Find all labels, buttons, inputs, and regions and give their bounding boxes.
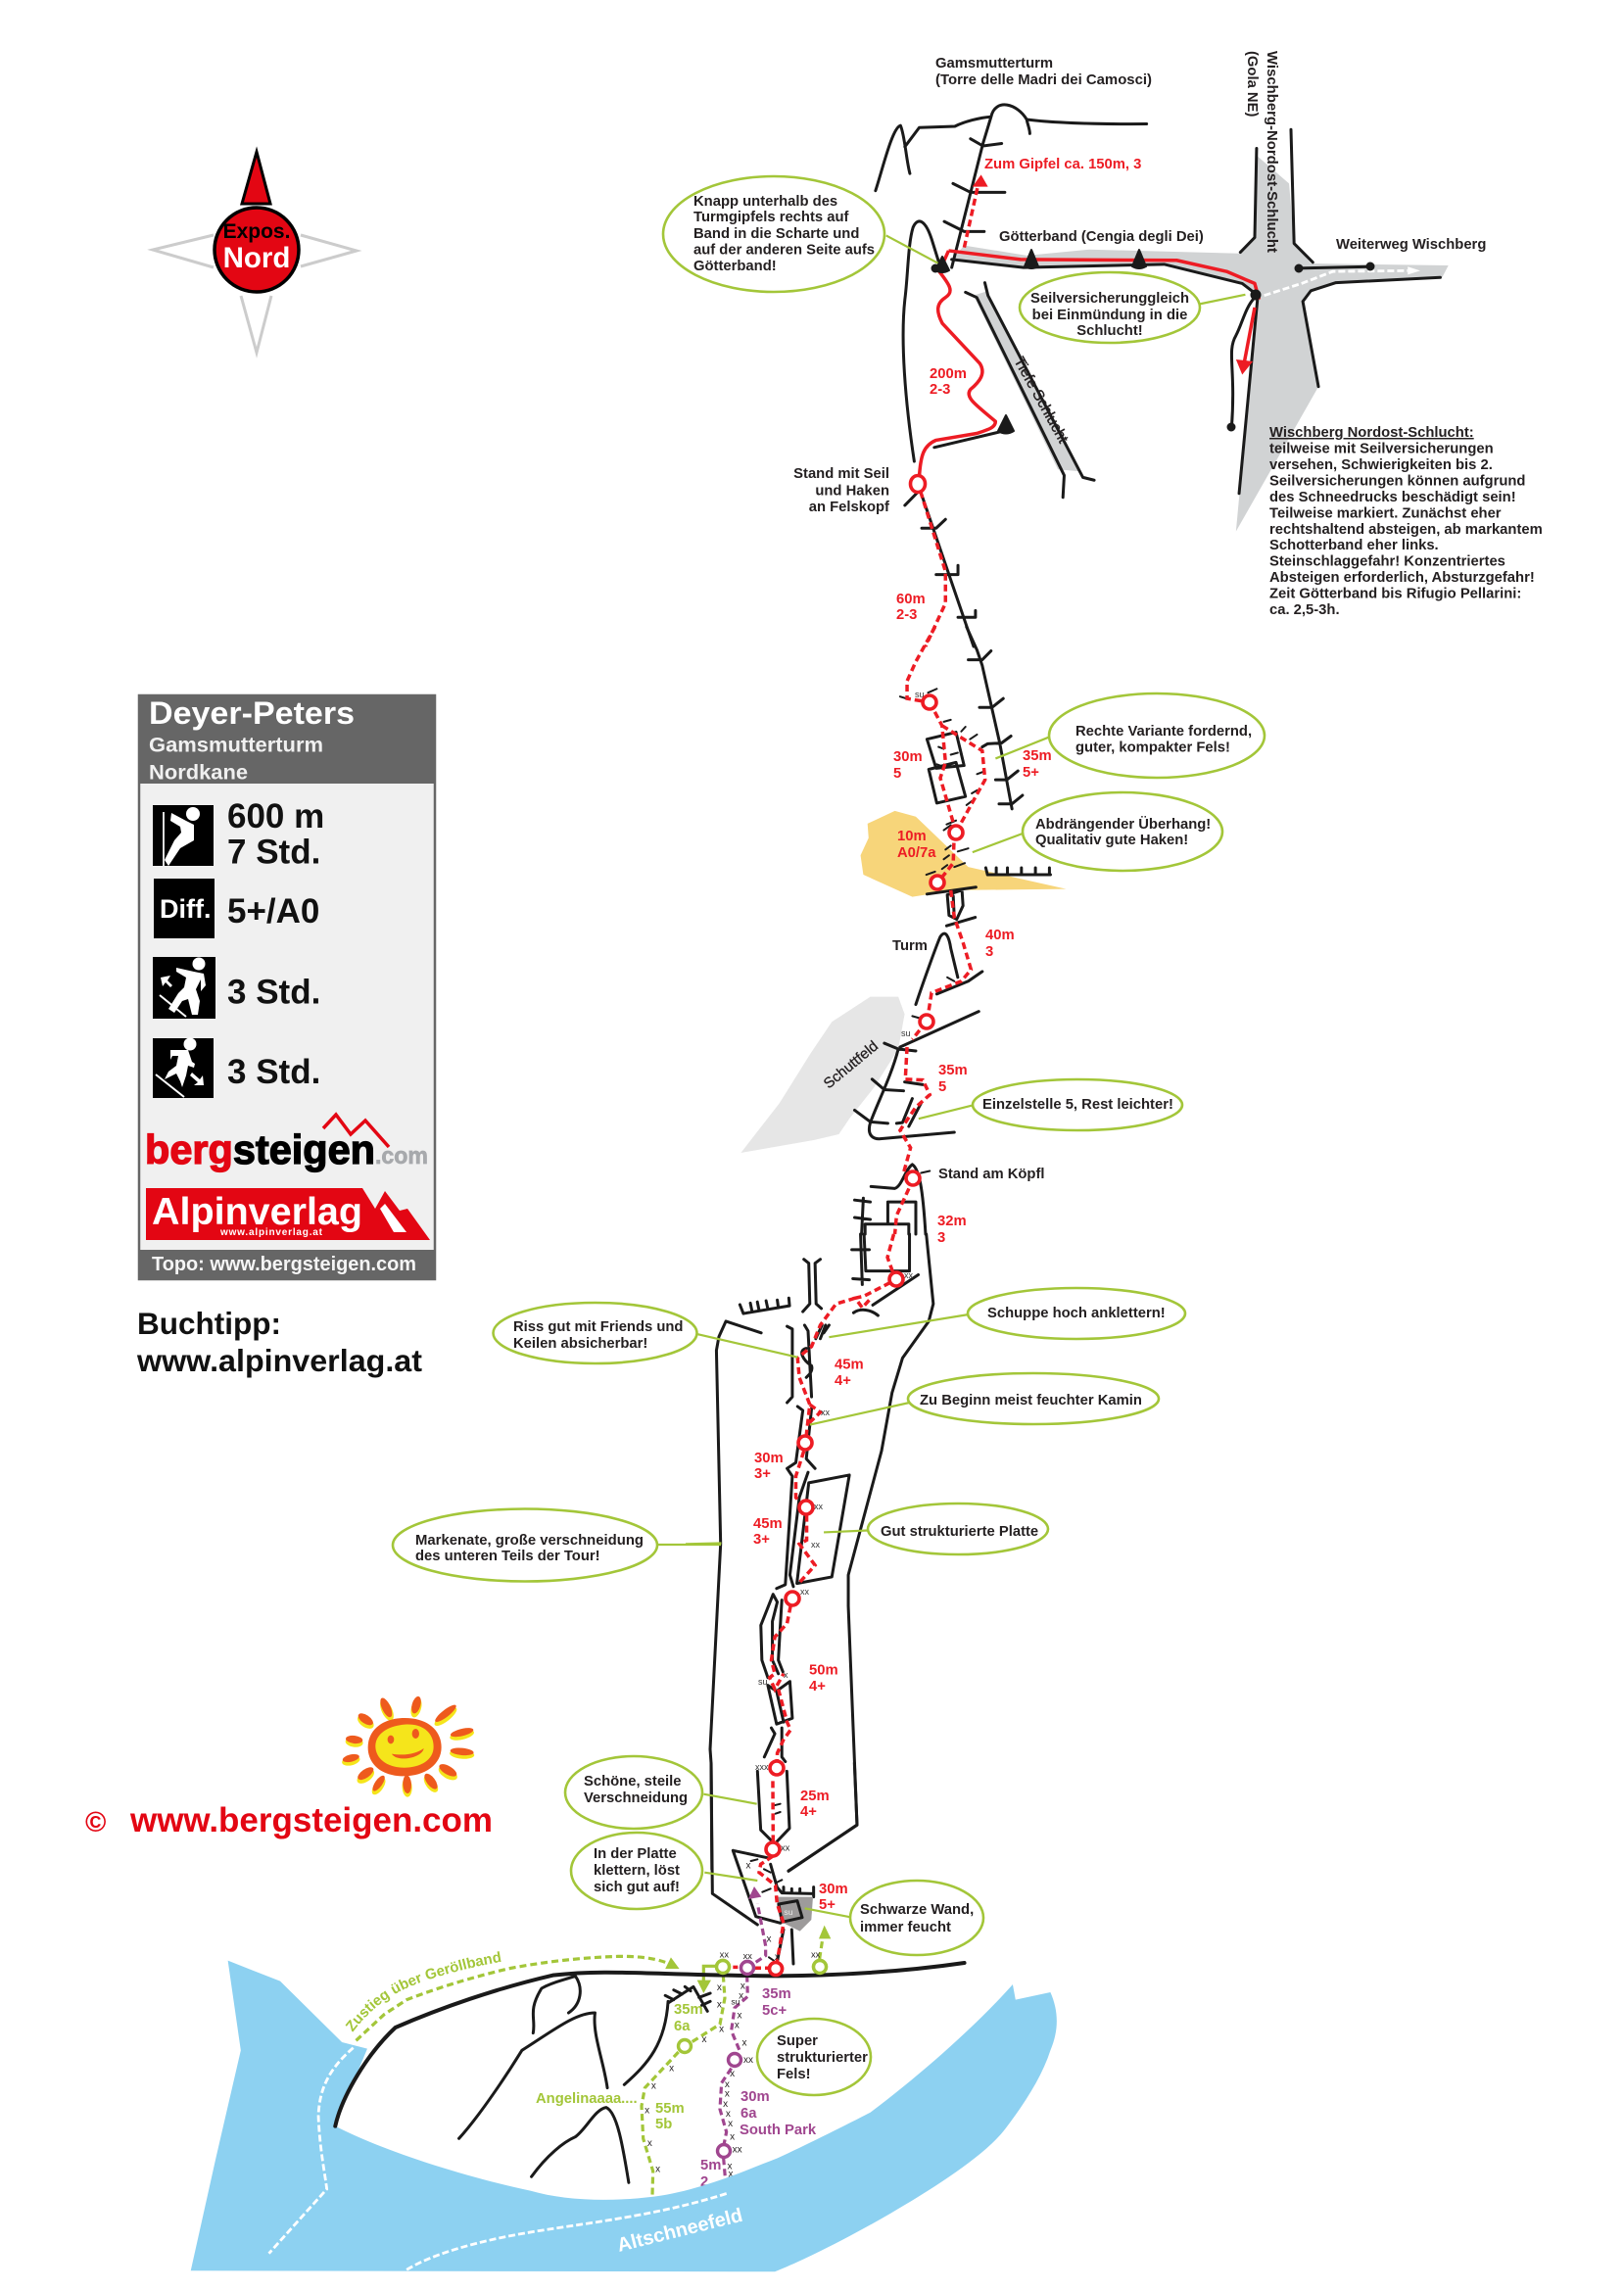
pitch labels: mid section: 3 (985, 944, 993, 960)
green arrows (819, 1926, 831, 1938)
callout: Knapp unterhalb: auf der anderen Seite aufs (693, 243, 875, 259)
panel header: Deyer-Peters (149, 695, 355, 731)
pitch labels: Angelina route: 6a (674, 2019, 691, 2034)
callout: Abdrängender Überhang: Qualitativ gute Haken! (1035, 833, 1188, 848)
logo: Alpinverlag: Alpinverlag (152, 1191, 362, 1233)
pitch labels: mid section: 35m (938, 1063, 968, 1078)
pitch labels: lower wall: 3+ (753, 1532, 770, 1548)
x marks: bolts (645, 1842, 821, 2180)
bolt ticks (900, 689, 982, 1173)
pitch labels: South Park route: 5m (700, 2158, 721, 2173)
icon: ascent hiker (153, 957, 215, 1019)
callout: Markenate Verschneidung (393, 1508, 721, 1581)
pitch labels: lower wall: 4+ (835, 1373, 851, 1389)
pitch labels: mid section: 5+ (1023, 765, 1039, 781)
x marks: bolts: x (669, 2063, 674, 2074)
x marks: bolts: x (775, 1952, 780, 1963)
green callout leaders (919, 738, 1049, 1119)
text block: Wischberg Nordost-Schlucht: des Schneedrucks beschädigt sein! (1269, 490, 1516, 505)
icon: smiling sun (341, 1695, 475, 1797)
panel header (138, 694, 436, 784)
x marks: bolts: su (731, 1997, 740, 2007)
label: Gamsmutterturm: Gamsmutterturm (935, 56, 1053, 72)
label: Tiefe Schlucht: Tiefe Schlucht (1011, 355, 1072, 447)
x marks: bolts: x (726, 2109, 731, 2120)
pitch labels: lower wall: 4+ (809, 1679, 826, 1694)
text block: Wischberg Nordost-Schlucht: Wischberg Nordost-Schlucht: (1269, 425, 1474, 441)
bolt ticks (751, 1804, 782, 1961)
text block: Wischberg Nordost-Schlucht: Seilversicherungen können aufgrund (1269, 474, 1525, 490)
callout: Seilversicherung: bei Einmündung in die (1032, 308, 1187, 323)
callout: Knapp unterhalb (663, 176, 884, 292)
label: Angelinaaaa route name: Angelinaaaa.... (536, 2091, 638, 2107)
wall outline and cracks (710, 1234, 933, 1871)
book tip: www.alpinverlag.at (136, 1343, 423, 1378)
book tip: Buchtipp: (137, 1306, 281, 1341)
text block: Wischberg Nordost-Schlucht: Absteigen erforderlich, Absturzgefahr! (1269, 570, 1535, 586)
panel header: Gamsmutterturm (149, 735, 323, 756)
x marks: bolts: x (740, 1981, 745, 1991)
x marks: bolts: xx (743, 2055, 753, 2066)
callout: Abdrängender Überhang: Abdrängender Überhang! (1035, 816, 1211, 833)
compass: exposure north: Nord (223, 242, 290, 274)
pitch labels: mid section: 5 (938, 1079, 946, 1095)
label: Schuttfeld: Schuttfeld (821, 1038, 882, 1092)
callout: Markenate Verschneidung: des unteren Teils der Tour! (415, 1549, 600, 1564)
text block: Wischberg Nordost-Schlucht: Zeit Götterband bis Rifugio Pellarini: (1269, 586, 1521, 601)
pitch label: 200m: 2-3 (930, 382, 950, 398)
summit route: red solid and dashed (886, 174, 1420, 646)
white descent paths (269, 2048, 727, 2269)
pitch labels: mid section: 3 (937, 1230, 945, 1246)
x marks: bolts: xx (720, 1949, 729, 1959)
pitch labels: mid section: 10m (897, 829, 927, 844)
label: gully vertical names (1244, 51, 1279, 253)
callout: Markenate Verschneidung: Markenate, große verschneidung (415, 1533, 644, 1549)
pitch labels: lower wall: 30m (754, 1451, 784, 1466)
rock outline strokes (876, 105, 1440, 646)
callout: Schöne Verschneidung (565, 1756, 702, 1829)
text block: Wischberg Nordost-Schlucht: rechtshaltend absteigen, ab markantem (1269, 522, 1543, 538)
icon: descent hiker (153, 1038, 214, 1098)
logo: Alpinverlag (146, 1188, 430, 1240)
x marks: bolts: x (735, 2020, 740, 2030)
purple route dashes (720, 1903, 766, 2181)
x marks: bolts: x (739, 1991, 743, 2002)
label: Gamsmutterturm (935, 56, 1152, 88)
callout: Schuppe: Schuppe hoch anklettern! (987, 1306, 1166, 1321)
deep gully shading (974, 292, 1079, 471)
x marks: bolts: x (737, 2010, 741, 2021)
label: stand with rope (793, 466, 889, 515)
scree gully shading (952, 156, 1449, 531)
copyright line: www.bergsteigen.com (129, 1801, 493, 1839)
re-drawn base rings over ledge (717, 1961, 827, 1975)
callout: Zu Beginn: Zu Beginn meist feuchter Kamin (920, 1393, 1142, 1408)
x marks: bolts: x (701, 2034, 706, 2045)
callout: Schwarze Wand (850, 1881, 983, 1955)
pitch labels: mid section: 32m (937, 1214, 967, 1229)
small protection marks on mid wall: su (901, 1028, 911, 1038)
logo: Alpinverlag: www.alpinverlag.at (219, 1227, 323, 1238)
text block: Wischberg Nordost-Schlucht: Steinschlaggefahr! Konzentriertes (1269, 554, 1505, 570)
red route dashes (770, 1234, 895, 1768)
callout: Super strukturierter Fels: Super (777, 2033, 818, 2049)
callout: In der Platte: klettern, löst (594, 1863, 680, 1879)
red route dashes (895, 627, 985, 1234)
label: approach: Zustieg über Geröllband (345, 1951, 502, 2031)
pitch label: 200m (930, 366, 967, 398)
text block: Wischberg Nordost-Schlucht: Teilweise markiert. Zunächst eher (1269, 505, 1502, 521)
approach path (357, 1956, 665, 2040)
pitch labels: Angelina route: 55m (655, 2101, 685, 2117)
callout: Gut strukturierte Platte (868, 1503, 1048, 1554)
pitch labels: lower wall: 45m (835, 1358, 864, 1373)
pitch label: 60m: 2-3 (896, 607, 917, 623)
rock outline strokes (854, 627, 1050, 1234)
green callout leaders (703, 1794, 850, 1917)
pitch labels: mid section: A0/7a (897, 845, 936, 861)
label: stand with rope: an Felskopf (809, 500, 889, 515)
text block: Wischberg Nordost-Schlucht (1269, 425, 1543, 618)
text block: Wischberg Nordost-Schlucht: teilweise mit Seilversicherungen (1269, 441, 1494, 456)
compass: exposure north: Expos. (223, 220, 290, 243)
route stations: green and purple rings (678, 1961, 827, 2157)
label: Turm: Turm (892, 938, 928, 954)
pitch labels: South Park route: 2 (700, 2174, 708, 2190)
pitch labels: mid section (893, 748, 1052, 1246)
pitch labels: lower wall: 25m (800, 1789, 830, 1804)
pitch labels: mid section: 5 (893, 766, 901, 782)
pitch labels: South Park route: 30m (740, 2089, 770, 2105)
pitch labels: Angelina route: 35m (674, 2002, 703, 2018)
book tip (136, 1306, 423, 1378)
icon: climber (153, 805, 214, 866)
pitch labels: lower wall: 45m (753, 1516, 783, 1532)
small protection marks on mid wall: xxx (755, 1762, 769, 1772)
pitch labels: Angelina route (655, 2002, 703, 2132)
old snowfield (191, 1961, 1057, 2271)
text: descent time: 3 Std. (227, 1053, 320, 1091)
callout: Seilversicherung: Seilversicherunggleich (1030, 291, 1189, 307)
anchor bolts on Götterband (932, 250, 1373, 433)
x marks: bolts: x (766, 1934, 771, 1945)
label: Götterband: Götterband (Cengia degli Dei) (999, 229, 1204, 245)
pitch labels: mid section: 35m (1023, 748, 1052, 764)
callout: In der Platte: In der Platte (594, 1846, 677, 1862)
callout: Rechte Variante (1049, 693, 1265, 778)
small protection marks on mid wall (755, 690, 925, 1772)
x marks: bolts: x (727, 2161, 732, 2172)
x marks: bolts: x (723, 2099, 728, 2110)
label: onward route: Weiterweg Wischberg (1336, 237, 1486, 253)
callout: Knapp unterhalb: Turmgipfels rechts auf (693, 210, 848, 225)
pitch label: 60m (896, 592, 926, 623)
label: Gamsmutterturm: (Torre delle Madri dei Camosci) (935, 72, 1152, 88)
x marks: bolts: x (725, 2079, 730, 2090)
x marks: bolts: xx (733, 2145, 742, 2156)
callout: Einzelstelle (973, 1079, 1182, 1130)
pitch labels: Angelina route: 5b (655, 2117, 672, 2132)
wet black wall patch (777, 1897, 813, 1932)
small protection marks on mid wall: xx (821, 1408, 831, 1417)
callout: Super strukturierter Fels (757, 2019, 871, 2095)
x marks: bolts: x (741, 2037, 746, 2048)
green route dashes (642, 1937, 823, 2196)
small protection marks on mid wall: su (758, 1677, 768, 1687)
callout: Rechte Variante: Rechte Variante fordernd, (1075, 724, 1252, 740)
small protection marks on mid wall: xx (814, 1502, 823, 1511)
x marks: bolts: x (719, 2024, 724, 2034)
pitch labels: lower wall (753, 1358, 864, 1913)
info panel: route summary (138, 694, 436, 1280)
panel footer: Topo: www.bergsteigen.com (152, 1254, 416, 1275)
callout: Knapp unterhalb: Götterband! (693, 259, 777, 274)
label: Stand am Köpfl: Stand am Köpfl (938, 1167, 1045, 1182)
pitch labels: South Park route: 6a (740, 2106, 757, 2122)
callout: Riss gut: Keilen absicherbar! (513, 1336, 647, 1352)
callout: Gut strukturierte Platte: Gut strukturierte Platte (881, 1524, 1038, 1540)
pitch label: 60m: 60m (896, 592, 926, 607)
summit area topo: terrain and rock lines (876, 105, 1449, 646)
callout: Super strukturierter Fels: Fels! (777, 2067, 811, 2082)
callout: Riss gut: Riss gut mit Friends und (513, 1319, 683, 1335)
x marks: bolts: x (728, 2119, 733, 2129)
icon: difficulty: Diff. (160, 894, 211, 924)
label: stand with rope: und Haken (815, 484, 889, 500)
x marks: bolts: x (725, 2088, 730, 2099)
rock outlines (459, 1976, 710, 2182)
compass: exposure north (153, 152, 357, 353)
x marks: bolts: x (655, 2165, 660, 2175)
callout: Einzelstelle: Einzelstelle 5, Rest leichter! (982, 1097, 1173, 1113)
logo: bergsteigen.com (145, 1115, 428, 1172)
base of wall: detail lines and routes (642, 1763, 857, 2196)
x marks: bolts: xx (811, 1950, 821, 1960)
callout: Abdrängender Überhang (1023, 792, 1222, 871)
small protection marks on mid wall: xx (811, 1540, 821, 1550)
route stations: red belay rings (766, 476, 963, 1975)
scree field shading (740, 997, 905, 1153)
callout: Knapp unterhalb: Band in die Scharte und (693, 226, 859, 242)
label: summit route: Zum Gipfel ca. 150m, 3 (984, 157, 1141, 172)
callout: Schöne Verschneidung: Verschneidung (584, 1790, 688, 1806)
x marks: bolts: x (647, 2138, 652, 2149)
red route dashes (733, 1781, 784, 1968)
text: length and time: 7 Std. (227, 833, 320, 872)
pitch labels: lower wall: 3+ (754, 1466, 771, 1482)
x marks: bolts: x (730, 2131, 735, 2142)
pitch labels: South Park route: 35m (762, 1986, 791, 2002)
small protection marks on mid wall: xx (904, 1270, 913, 1280)
callout: Riss gut (494, 1303, 697, 1363)
flake ticks (816, 1325, 829, 1339)
label: gully vertical names: Wischberg-Nordost-Schlucht (1264, 51, 1279, 253)
x marks: bolts: x (651, 2081, 656, 2092)
text block: Wischberg Nordost-Schlucht: Schotterband eher links. (1269, 538, 1439, 553)
callout: Rechte Variante: guter, kompakter Fels! (1075, 740, 1230, 756)
callout: In der Platte (571, 1833, 702, 1909)
base area: snowfield, ledge and rock (191, 1956, 1057, 2271)
overhang shading (861, 811, 1067, 897)
pitch labels: lower wall: 5+ (819, 1897, 836, 1913)
text: ascent time: 3 Std. (227, 974, 320, 1011)
label: stand with rope: Stand mit Seil (793, 466, 889, 482)
callout: Seilversicherung: Schlucht! (1076, 323, 1143, 339)
pitch labels: mid section: 30m (893, 749, 923, 765)
callout: Schöne Verschneidung: Schöne, steile (584, 1774, 682, 1790)
pitch labels: mid section: 40m (985, 928, 1015, 943)
pitch labels: South Park route (700, 1986, 817, 2190)
wall base and corners (711, 1763, 857, 1964)
x marks: bolts: xx (781, 1842, 790, 1852)
main ledge line (335, 1963, 965, 2126)
label: Altschneefeld: Altschneefeld (615, 2205, 744, 2257)
copyright line: © (85, 1807, 106, 1838)
callout: In der Platte: sich gut auf! (594, 1880, 680, 1895)
text: length and time (227, 797, 324, 872)
panel footer (138, 1250, 436, 1280)
text block: Wischberg Nordost-Schlucht: versehen, Schwierigkeiten bis 2. (1269, 457, 1493, 473)
x marks: bolts: xx (743, 1951, 752, 1961)
pitch label: 200m: 200m (930, 366, 967, 382)
pitch labels: lower wall: 30m (819, 1882, 848, 1897)
x marks: bolts: x (717, 1982, 722, 1993)
callout: Knapp unterhalb: Knapp unterhalb des (693, 194, 837, 210)
small protection marks on mid wall: xx (800, 1587, 809, 1597)
logo: bergsteigen.com: bergsteigen (145, 1126, 375, 1172)
logo: bergsteigen.com: .com (375, 1143, 428, 1169)
text block: Wischberg Nordost-Schlucht: ca. 2,5-3h. (1269, 602, 1340, 618)
base of wall: detail lines and routes: su (784, 1907, 793, 1917)
x marks: bolts: x (730, 2069, 735, 2079)
label: gully vertical names: (Gola NE) (1244, 51, 1260, 117)
pitch labels: lower wall: 4+ (800, 1804, 817, 1820)
small protection marks on mid wall: su (915, 690, 925, 699)
x marks: bolts: x (717, 1999, 722, 2010)
pitch labels: lower wall: 50m (809, 1663, 838, 1679)
pitch labels: South Park route: South Park (740, 2123, 817, 2138)
x marks: bolts: x (745, 1861, 750, 1872)
green callout leaders (686, 1314, 967, 1544)
x marks: bolts: x (728, 2170, 733, 2180)
text: length and time: 600 m (227, 797, 324, 835)
callout: Schwarze Wand: Schwarze Wand, (860, 1902, 974, 1918)
pitch labels: South Park route: 5c+ (762, 2003, 787, 2019)
callout: Schwarze Wand: immer feucht (860, 1920, 951, 1935)
callout: Seilversicherung (1020, 272, 1200, 343)
callout: Schuppe (968, 1288, 1185, 1339)
x marks: bolts: x (645, 2106, 649, 2117)
panel header: Nordkane (149, 762, 248, 784)
mid section: terrain and rock lines (740, 627, 1067, 1234)
small protection marks on mid wall: x (784, 1670, 788, 1680)
icon: difficulty (154, 879, 215, 938)
callout: Super strukturierter Fels: strukturierter (777, 2050, 868, 2066)
callout: Zu Beginn (908, 1373, 1159, 1424)
text: difficulty grade: 5+/A0 (227, 892, 319, 931)
lower wall: terrain and rock lines (686, 1234, 967, 1871)
